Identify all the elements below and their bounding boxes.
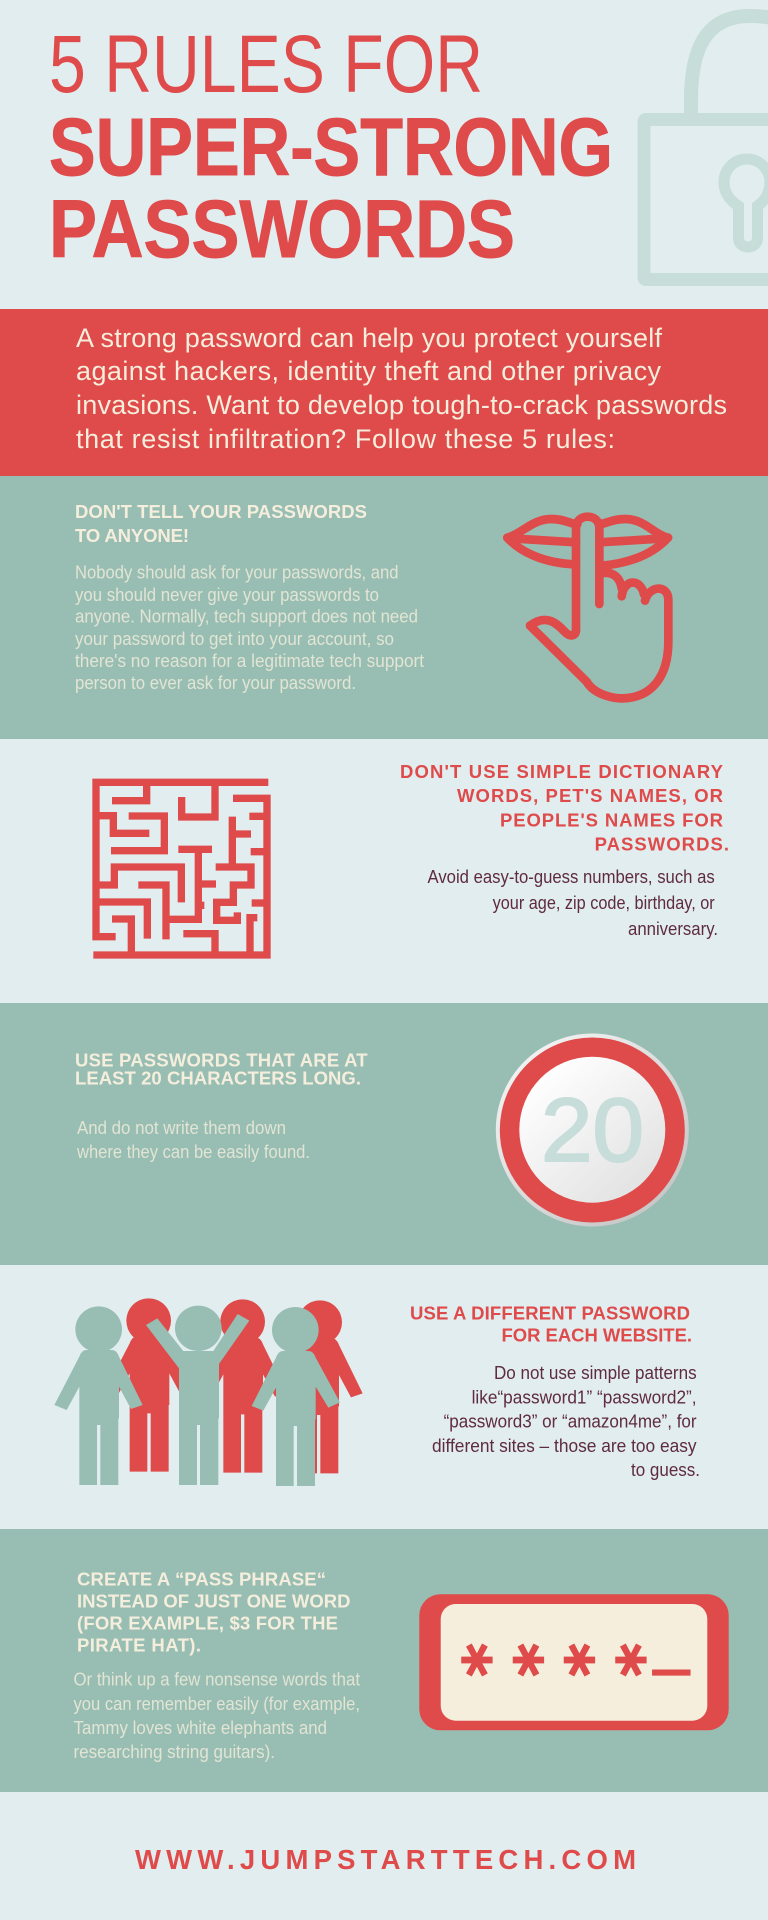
intro text: against hackers, identity theft and other privacy <box>76 356 662 386</box>
icon: password field: * <box>479 1643 553 1677</box>
intro text: that resist infiltration? Follow these 5 rules: <box>76 424 615 454</box>
panel: rule 4 <box>0 1265 768 1529</box>
icon: 20 speed sign: 20 <box>541 1081 644 1181</box>
title: SUPER-STRONG <box>49 102 613 193</box>
body text: rule 1: anyone. Normally, tech support does not need <box>75 606 418 626</box>
body text: rule 4 <box>432 1363 700 1480</box>
body text: rule 5 <box>74 1670 360 1762</box>
intro text: A strong password can help you protect yourself <box>76 323 662 353</box>
heading: rule 2: WORDS, PET'S NAMES, OR <box>457 785 723 806</box>
icon: password field: _ <box>652 1511 691 1691</box>
footer url: WWW.JUMPSTARTTECH.COM <box>135 1844 636 1875</box>
heading: rule 5: (FOR EXAMPLE, $3 FOR THE <box>77 1613 338 1634</box>
body text: rule 2 <box>428 867 718 939</box>
body text: rule 1: you should never give your passwords to <box>75 585 379 605</box>
panel: rule 1 <box>0 476 768 739</box>
icon: password field: * <box>428 1643 502 1677</box>
body text: rule 3: where they can be easily found. <box>76 1142 310 1162</box>
panel: rule 5 <box>0 1511 768 1792</box>
body text: rule 4: Do not use simple patterns <box>494 1363 697 1383</box>
body text: rule 4: like“password1” “password2”, <box>472 1388 697 1408</box>
body text: rule 4: to guess. <box>631 1460 700 1480</box>
icon: password field: * <box>531 1643 605 1677</box>
icon: shush lips and finger <box>507 517 668 698</box>
heading: rule 1 <box>75 501 367 546</box>
body text: rule 5: Tammy loves white elephants and <box>74 1718 327 1738</box>
heading: rule 2 <box>400 761 729 854</box>
icon: password field: * <box>582 1643 656 1677</box>
heading: rule 4: USE A DIFFERENT PASSWORD <box>410 1302 690 1324</box>
body text: rule 1: your password to get into your account, so <box>75 629 394 649</box>
body text: rule 1 <box>75 562 424 693</box>
panel: footer <box>0 1792 768 1920</box>
body text: rule 5: researching string guitars). <box>74 1742 275 1762</box>
body text: rule 1: Nobody should ask for your passwords, and <box>75 562 398 582</box>
heading: rule 4 <box>410 1302 692 1346</box>
icon: group of people <box>54 1298 363 1486</box>
icon: maze <box>93 782 268 955</box>
panel: intro <box>0 309 768 476</box>
body text: rule 4: different sites – those are too easy <box>432 1436 697 1456</box>
body text: rule 4: “password3” or “amazon4me”, for <box>444 1412 697 1432</box>
body text: rule 5: you can remember easily (for example, <box>74 1694 360 1714</box>
intro text <box>76 323 727 454</box>
panel: rule 2 <box>0 739 768 1003</box>
intro text: invasions. Want to develop tough-to-crack passwords <box>76 390 727 420</box>
body text: rule 3: And do not write them down <box>77 1118 286 1138</box>
panel: rule 3 <box>0 1003 768 1265</box>
heading: rule 1: DON'T TELL YOUR PASSWORDS <box>75 501 367 522</box>
body text: rule 1: person to ever ask for your password. <box>75 673 356 693</box>
heading: rule 2: PASSWORDS. <box>595 834 729 854</box>
heading: rule 1: TO ANYONE! <box>75 525 189 546</box>
icon: password field <box>419 1511 729 1730</box>
heading: rule 3: USE PASSWORDS THAT ARE AT <box>75 1050 368 1071</box>
body text: rule 2: anniversary. <box>628 919 718 939</box>
body text: rule 2: Avoid easy-to-guess numbers, such as <box>428 867 715 887</box>
heading: rule 5 <box>77 1569 350 1656</box>
title <box>49 19 613 275</box>
body text: rule 3 <box>76 1118 310 1162</box>
body text: rule 1: there's no reason for a legitimate tech support <box>75 651 424 671</box>
body text: rule 5: Or think up a few nonsense words that <box>74 1670 360 1690</box>
body text: rule 2: your age, zip code, birthday, or <box>493 893 715 913</box>
title: 5 RULES FOR <box>49 19 483 110</box>
icon: 20 speed sign <box>496 1034 689 1226</box>
panel: header <box>0 0 768 309</box>
heading: rule 5: PIRATE HAT). <box>77 1635 201 1656</box>
heading: rule 4: FOR EACH WEBSITE. <box>502 1324 692 1346</box>
heading: rule 2: DON'T USE SIMPLE DICTIONARY <box>400 761 724 782</box>
icon: padlock <box>644 16 768 280</box>
heading: rule 5: INSTEAD OF JUST ONE WORD <box>77 1591 350 1612</box>
heading: rule 3: LEAST 20 CHARACTERS LONG. <box>75 1068 361 1088</box>
heading: rule 3 <box>75 1050 368 1088</box>
heading: rule 5: CREATE A “PASS PHRASE“ <box>77 1569 326 1590</box>
title: PASSWORDS <box>49 184 515 275</box>
heading: rule 2: PEOPLE'S NAMES FOR <box>500 809 723 830</box>
